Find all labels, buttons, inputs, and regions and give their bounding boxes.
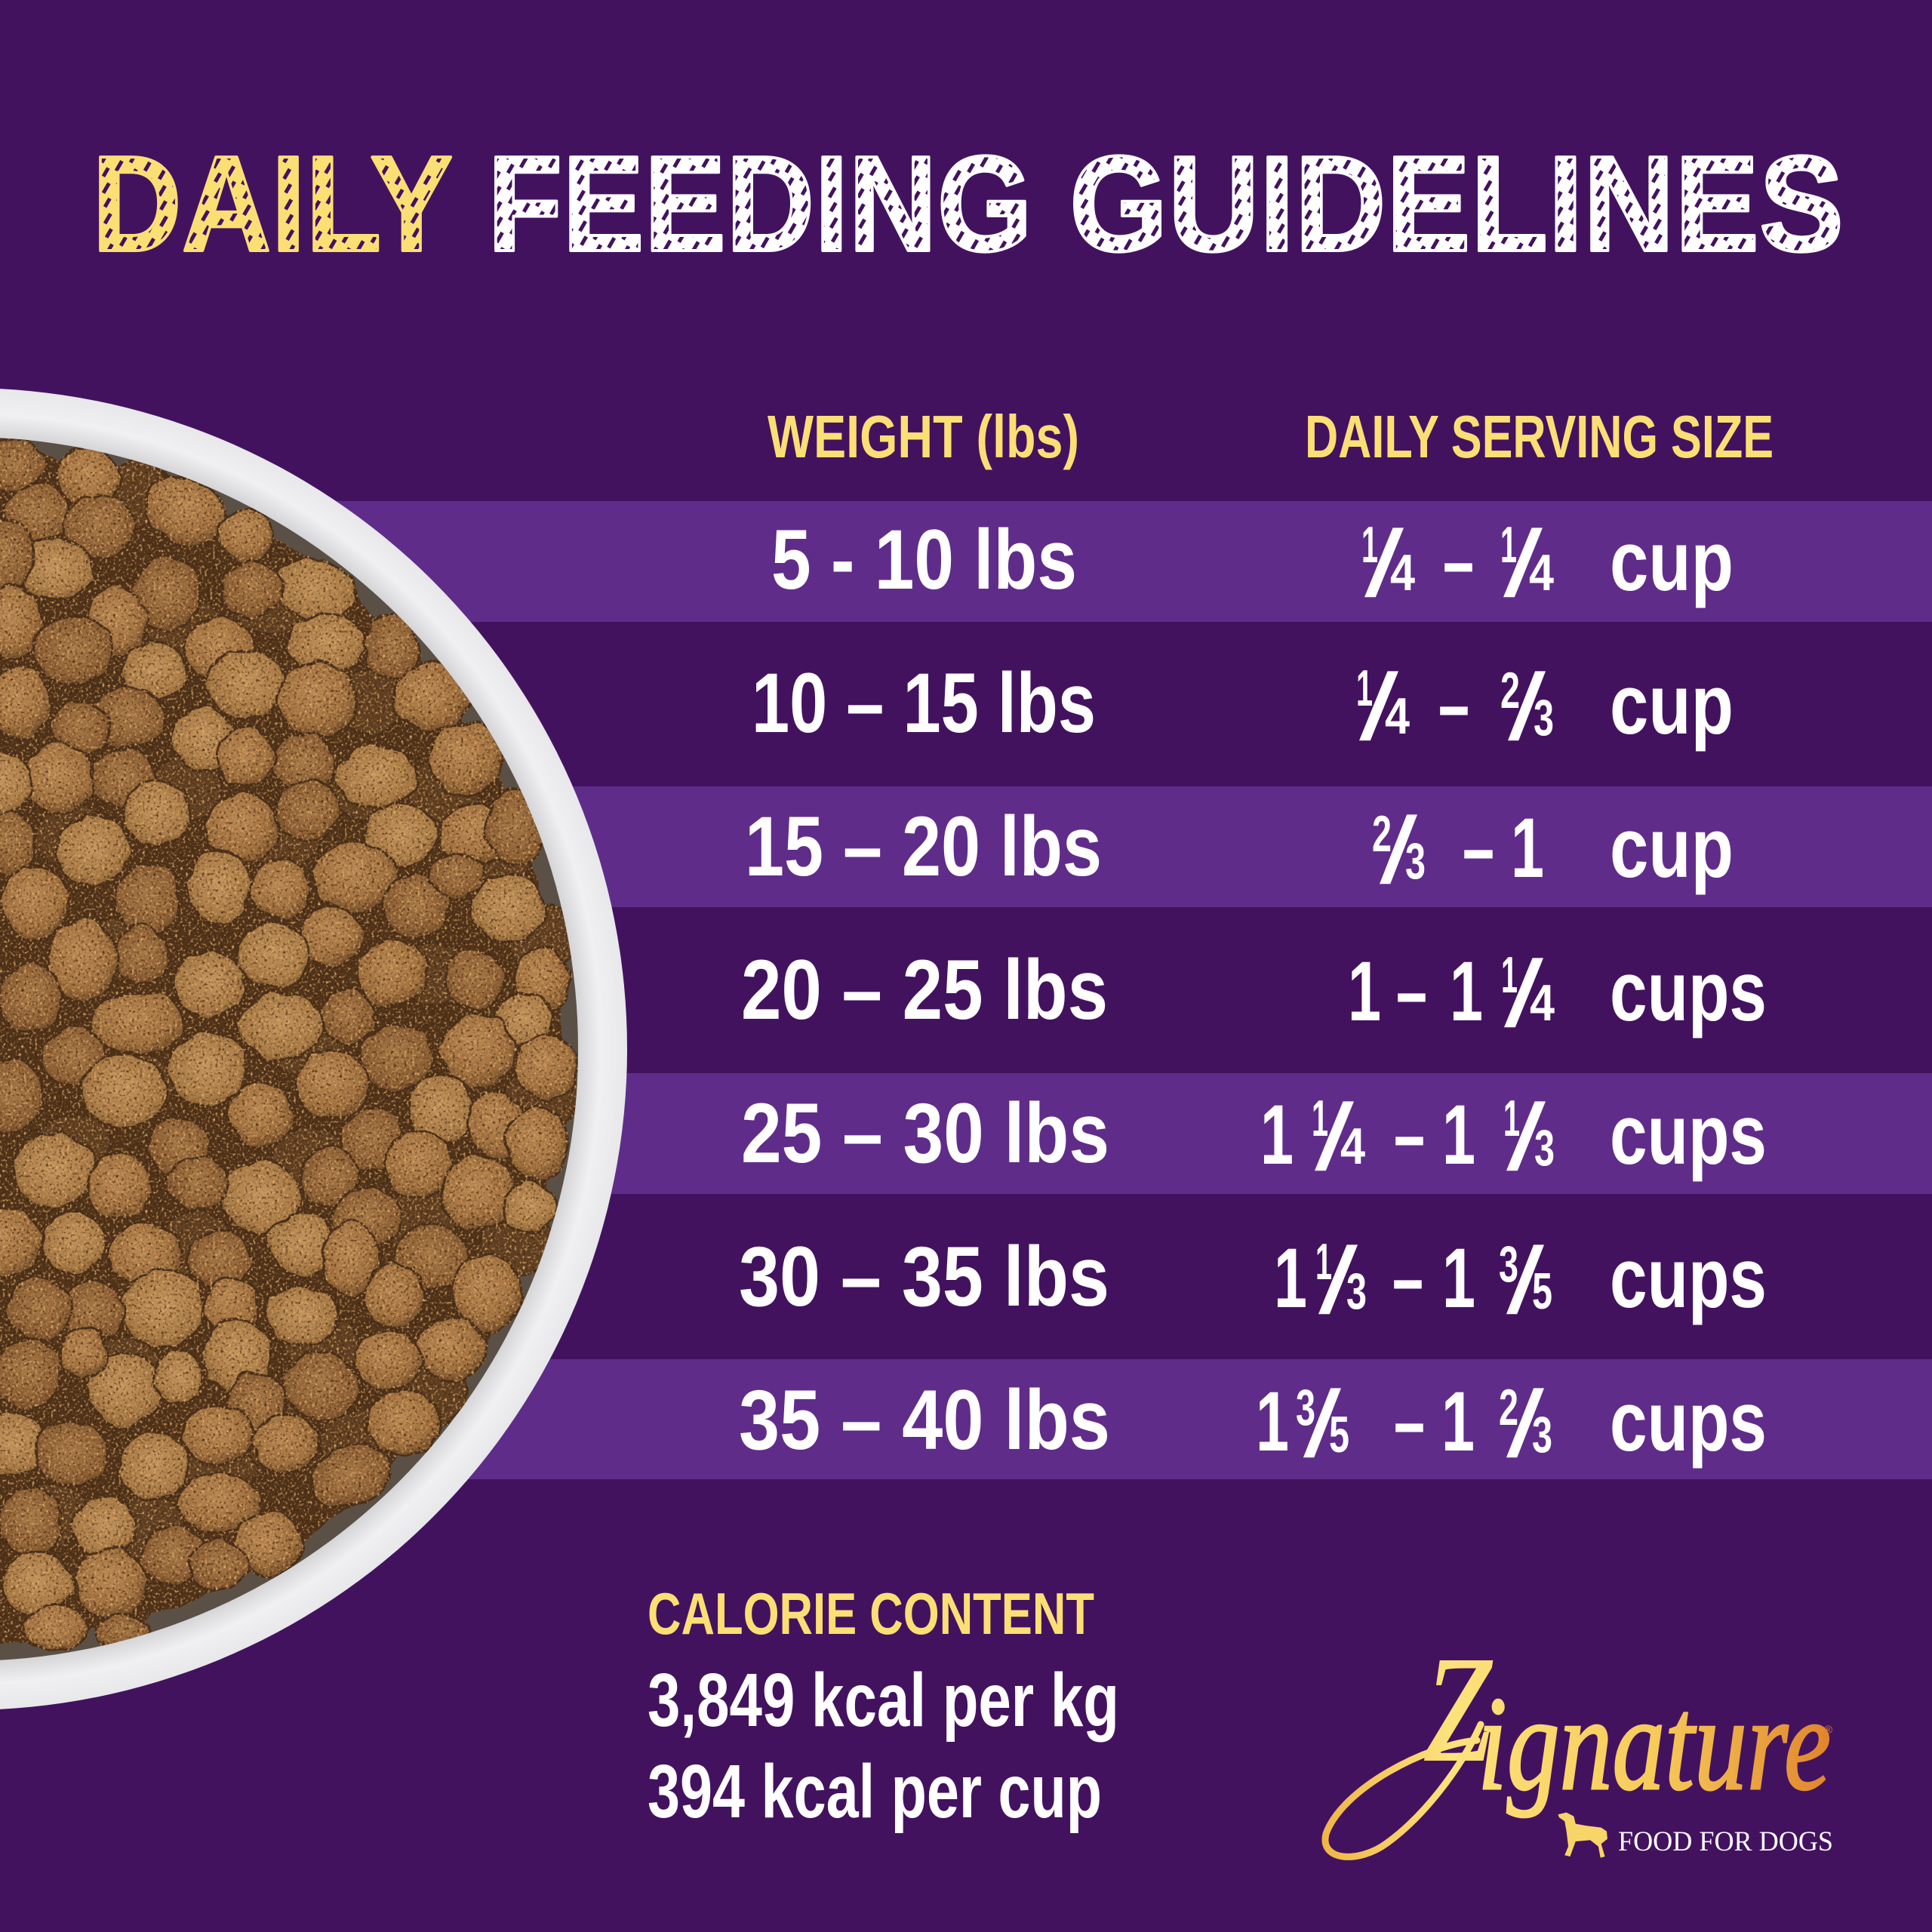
food bowl with kibble bbox=[0, 388, 627, 1710]
table header: daily serving size: DAILY SERVING SIZE bbox=[1305, 403, 1774, 470]
serving row 6: 3 bbox=[1346, 1263, 1367, 1320]
serving row 2: 4 bbox=[1385, 688, 1410, 745]
serving row 5: 1 bbox=[1442, 1088, 1475, 1182]
table header: weight: WEIGHT (lbs) bbox=[768, 403, 1079, 470]
serving row 7: 5 bbox=[1329, 1406, 1349, 1463]
serving row 2: cup bbox=[1610, 657, 1734, 752]
serving row 5: / bbox=[1506, 1085, 1546, 1190]
serving row 2: 3 bbox=[1534, 689, 1554, 746]
serving row 1: 1 bbox=[1500, 516, 1517, 574]
logo swash outer bbox=[1325, 1724, 1481, 1857]
serving row 2: – bbox=[1438, 657, 1469, 752]
serving row 4: 1 bbox=[1501, 946, 1518, 1004]
bowl rim bbox=[0, 388, 627, 1710]
serving row 3: cup bbox=[1610, 801, 1734, 895]
serving row 7 bbox=[1256, 1372, 1767, 1477]
serving row 3: 1 bbox=[1511, 801, 1544, 895]
serving row 5: 1 bbox=[1312, 1090, 1328, 1147]
serving row 7: 1 bbox=[1256, 1374, 1289, 1469]
registered mark: ® bbox=[1824, 1724, 1832, 1737]
serving row 7: 2 bbox=[1499, 1379, 1518, 1436]
weight row 6: 30 – 35 lbs bbox=[739, 1229, 1109, 1324]
serving row 7: / bbox=[1303, 1372, 1341, 1477]
title word: GUIDELINES: GUIDELINES bbox=[1069, 128, 1844, 280]
kibble pile bbox=[0, 438, 579, 1651]
serving row 2: 1 bbox=[1356, 660, 1373, 717]
serving row 6: 3 bbox=[1499, 1235, 1518, 1293]
serving row 4: 4 bbox=[1530, 974, 1555, 1032]
serving row 2 bbox=[1356, 655, 1734, 760]
serving row 5: 3 bbox=[1534, 1119, 1555, 1177]
logo tagline: FOOD FOR DOGS bbox=[1618, 1826, 1833, 1857]
serving row 5: – bbox=[1394, 1088, 1425, 1182]
serving row 1: / bbox=[1503, 512, 1543, 617]
serving row 3: 2 bbox=[1372, 805, 1392, 863]
calorie content block bbox=[648, 1580, 1119, 1834]
serving row 4: / bbox=[1504, 942, 1543, 1047]
serving row 7: 3 bbox=[1532, 1406, 1552, 1463]
weight row 2: 10 – 15 lbs bbox=[752, 656, 1096, 750]
calorie heading: CALORIE CONTENT bbox=[648, 1580, 1094, 1647]
title word: DAILY: DAILY bbox=[92, 128, 453, 280]
serving row 5 bbox=[1260, 1085, 1767, 1190]
serving row 1: 4 bbox=[1390, 544, 1415, 601]
serving row 3: – bbox=[1463, 801, 1494, 895]
weight column bbox=[739, 512, 1110, 1467]
serving row 2: / bbox=[1508, 655, 1546, 760]
serving row 5: 1 bbox=[1260, 1088, 1294, 1182]
serving row 6: 5 bbox=[1532, 1263, 1552, 1320]
calorie per cup: 394 kcal per cup bbox=[648, 1749, 1102, 1834]
serving row 6: 1 bbox=[1315, 1233, 1332, 1291]
serving row 1 bbox=[1361, 512, 1734, 617]
serving row 6: – bbox=[1392, 1231, 1423, 1325]
serving row 7: 3 bbox=[1296, 1379, 1315, 1436]
weight row 7: 35 – 40 lbs bbox=[739, 1373, 1110, 1467]
logo: Zignature food for dogs bbox=[1325, 1626, 1833, 1858]
serving row 1: 1 bbox=[1361, 516, 1378, 574]
weight row 1: 5 - 10 lbs bbox=[771, 512, 1077, 607]
serving row 7: 1 bbox=[1441, 1374, 1475, 1469]
title word: FEEDING: FEEDING bbox=[488, 128, 1032, 280]
serving row 5: 1 bbox=[1503, 1090, 1520, 1147]
serving row 1: / bbox=[1364, 512, 1404, 617]
serving row 1: cup bbox=[1610, 514, 1734, 608]
serving row 2: 2 bbox=[1500, 662, 1520, 719]
weight row 4: 20 – 25 lbs bbox=[741, 943, 1108, 1037]
serving row 3 bbox=[1372, 798, 1734, 903]
logo wordmark: ignature bbox=[1478, 1669, 1831, 1818]
serving row 6 bbox=[1274, 1229, 1767, 1334]
serving row 6: / bbox=[1506, 1229, 1544, 1334]
serving row 7: / bbox=[1506, 1372, 1544, 1477]
logo letter Z: Z bbox=[1423, 1626, 1492, 1793]
serving row 6: / bbox=[1318, 1229, 1358, 1334]
calorie per kg: 3,849 kcal per kg bbox=[648, 1658, 1119, 1743]
striped table bands bbox=[0, 501, 1932, 1479]
serving row 7: cups bbox=[1610, 1374, 1767, 1469]
serving row 4: cups bbox=[1610, 944, 1767, 1038]
serving row 4 bbox=[1348, 942, 1767, 1047]
serving row 5: cups bbox=[1610, 1088, 1767, 1182]
serving row 7: – bbox=[1394, 1374, 1425, 1469]
weight row 3: 15 – 20 lbs bbox=[745, 799, 1102, 894]
icon: dog silhouette bbox=[1558, 1813, 1607, 1858]
weight row 5: 25 – 30 lbs bbox=[741, 1086, 1109, 1180]
bowl interior bbox=[0, 437, 578, 1661]
title bbox=[92, 128, 1844, 280]
serving row 3: 3 bbox=[1405, 832, 1426, 890]
serving row 6: 1 bbox=[1442, 1231, 1475, 1325]
serving row 6: cups bbox=[1610, 1231, 1767, 1325]
serving row 4: 1 bbox=[1450, 944, 1483, 1038]
serving row 1: – bbox=[1443, 514, 1474, 608]
serving row 5: 4 bbox=[1340, 1118, 1365, 1175]
serving row 2: / bbox=[1359, 655, 1398, 760]
serving row 6: 1 bbox=[1274, 1231, 1307, 1325]
serving row 3: / bbox=[1380, 798, 1417, 903]
serving row 5: / bbox=[1315, 1085, 1354, 1190]
serving row 1: 4 bbox=[1529, 544, 1554, 601]
serving row 4: 1 bbox=[1348, 944, 1381, 1038]
serving row 4: – bbox=[1396, 944, 1427, 1038]
